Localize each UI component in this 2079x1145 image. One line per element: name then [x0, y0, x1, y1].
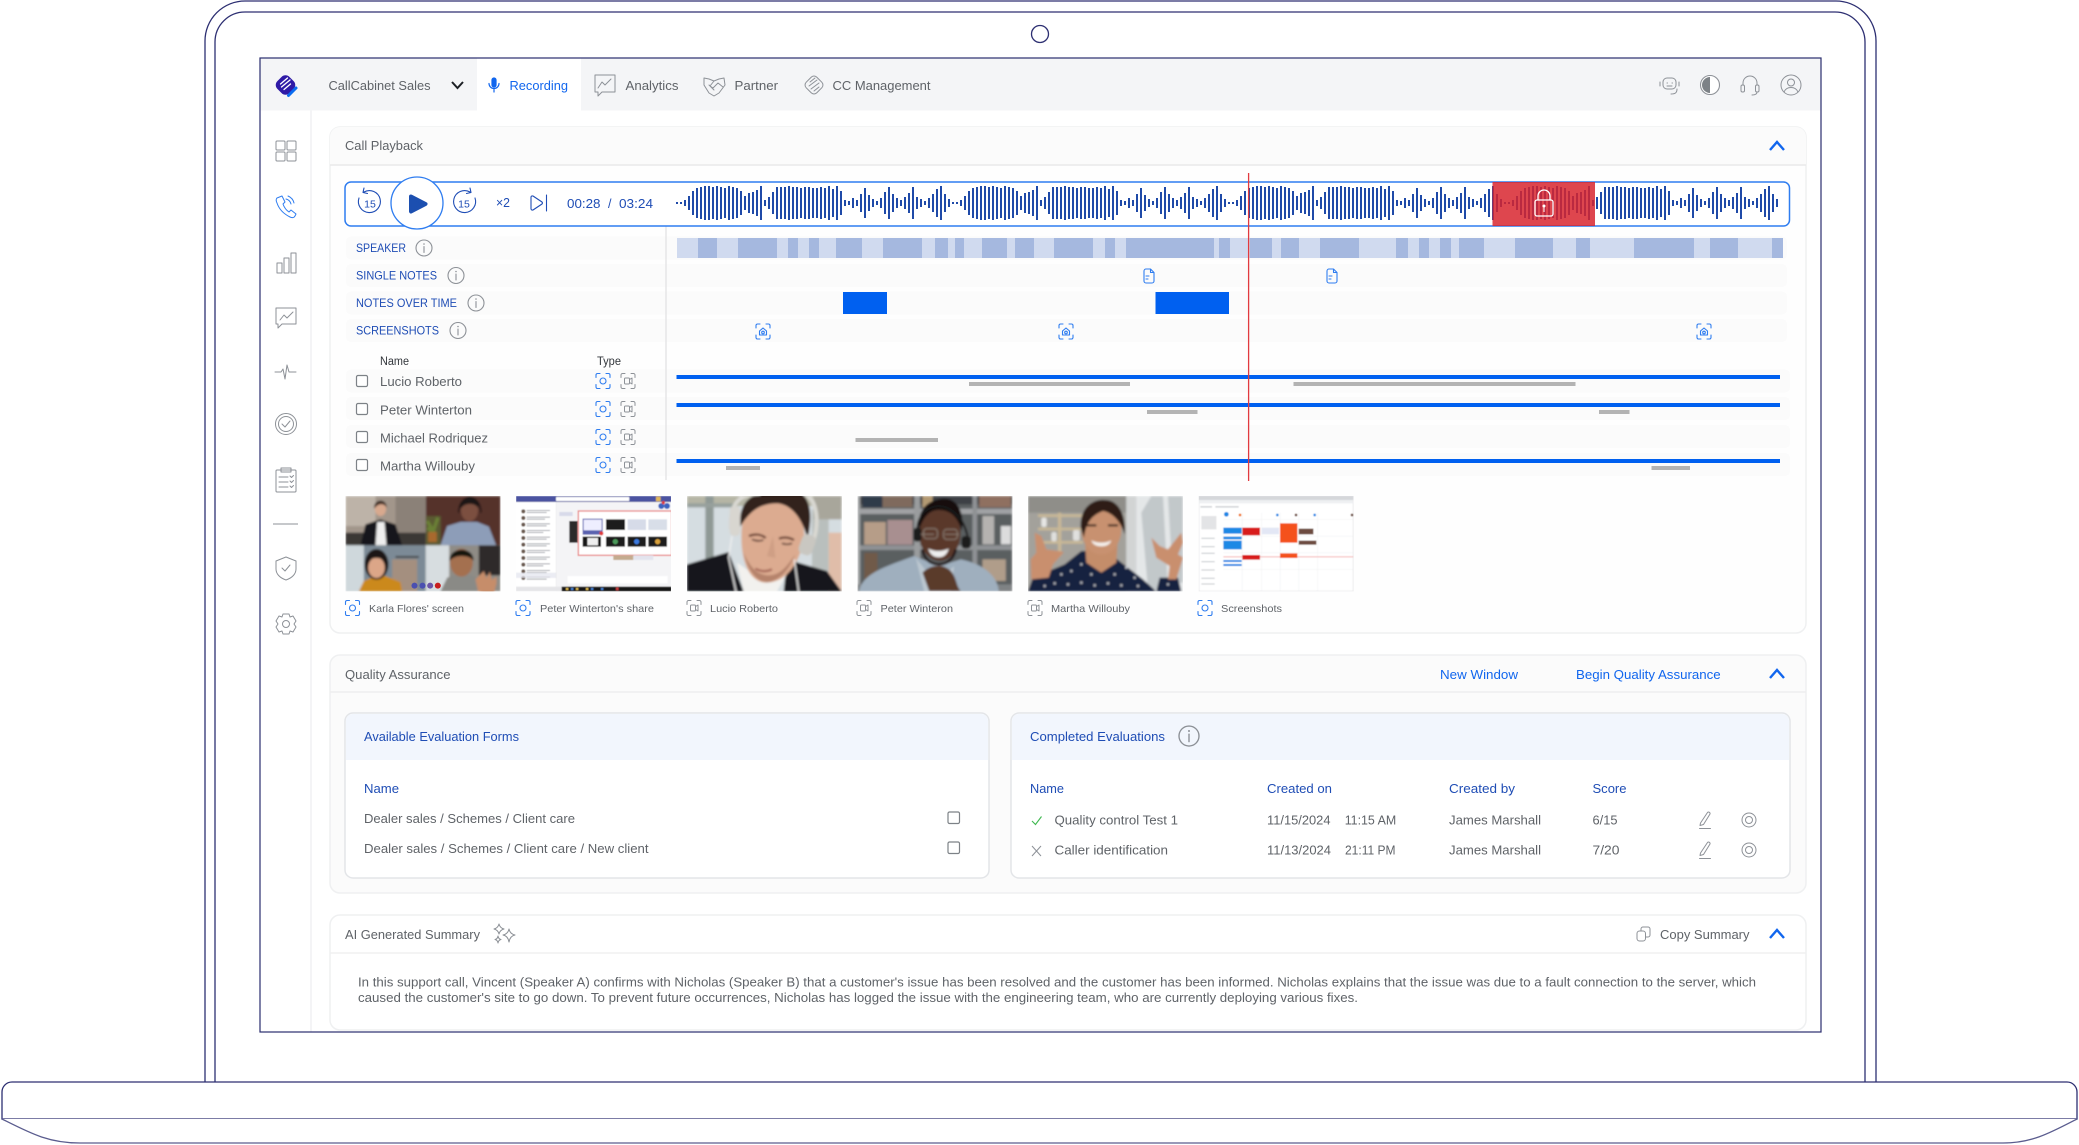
heading: ai generated summary: AI Generated Summary — [345, 928, 481, 942]
icon: headset — [1741, 76, 1759, 95]
label: single notes: SINGLE NOTES — [356, 268, 437, 282]
left sidebar — [273, 110, 311, 1032]
icon: shield — [276, 557, 296, 580]
participants table header: Type — [597, 356, 621, 368]
speaker track — [677, 238, 1783, 258]
caption: martha willouby: Martha Willouby — [1051, 603, 1131, 615]
summary text: In this support call, Vincent (Speaker A) confirms with Nicholas (Speaker B) that a customer's issue has been resolved and the customer has been informed. Nicholas explains that the issue was due to a fault connection to the server, which — [358, 976, 1756, 990]
card: completed evaluations — [1011, 713, 1790, 878]
participants table header — [380, 356, 621, 368]
laptop lid outline — [205, 1, 1876, 1082]
icon: collapse chevron — [1770, 142, 1784, 150]
time display: 00:28 — [567, 197, 601, 211]
tab: analytics: Analytics — [626, 79, 678, 93]
evaluation row 1: James Marshall — [1449, 814, 1541, 828]
audio waveform — [677, 186, 1777, 220]
panel: ai generated summary — [330, 915, 1806, 1030]
evaluation row 1 — [1032, 812, 1756, 828]
icon: play button — [391, 177, 443, 229]
participant: peter winterton — [356, 402, 635, 418]
copy summary button: Copy Summary — [1660, 928, 1750, 942]
participant: martha willouby — [356, 458, 635, 474]
icon: analytics — [595, 75, 615, 96]
participant: michael rodriquez — [356, 430, 635, 446]
panel: call playback — [330, 127, 1806, 633]
label: notes over time: NOTES OVER TIME — [356, 296, 457, 310]
icon: forward 15 — [454, 188, 476, 213]
icon: rewind 15 — [358, 188, 380, 213]
icon: bar chart — [277, 253, 296, 273]
evaluation row 2: Caller identification — [1054, 844, 1168, 858]
form row 1 — [364, 812, 960, 826]
icon: sparkles — [494, 924, 515, 943]
evaluation row 1: 11:15 AM — [1345, 814, 1396, 828]
icon: collapse chevron — [1770, 930, 1784, 938]
icon: logo — [273, 73, 298, 97]
thumbnail: peter winteron — [858, 496, 1012, 591]
participants table header: Name — [380, 356, 409, 368]
single note markers — [1144, 269, 1337, 283]
table header — [1030, 782, 1627, 796]
heading: call playback: Call Playback — [345, 139, 424, 153]
participant: lucio roberto: Lucio Roberto — [380, 375, 462, 389]
participant: lucio roberto — [356, 374, 635, 389]
tab: cc management: CC Management — [832, 79, 931, 93]
evaluation row 2: 7/20 — [1592, 844, 1620, 858]
tab: partner: Partner — [734, 79, 778, 93]
icon: cc management — [803, 74, 825, 96]
table header: Created on — [1267, 782, 1332, 796]
caption: peter winterton share — [516, 600, 654, 616]
participant: martha willouby: Martha Willouby — [380, 460, 476, 474]
laptop base — [2, 1082, 2077, 1143]
thumbnail: calendar screenshot — [1199, 496, 1353, 591]
evaluation row 2: James Marshall — [1449, 844, 1541, 858]
icon: skip — [531, 195, 546, 211]
form row 2: Dealer sales / Schemes / Client care / New client — [364, 842, 649, 856]
icon: forward 15: 15 — [458, 198, 470, 210]
app screen — [260, 58, 1821, 1032]
evaluation row 1: Quality control Test 1 — [1054, 814, 1178, 828]
time display: 03:24 — [619, 197, 653, 211]
panel: quality assurance — [330, 655, 1806, 893]
screenshot markers — [756, 324, 1711, 339]
caption: peter winteron — [857, 600, 953, 616]
evaluation row 2 — [1032, 842, 1756, 858]
table header: Score — [1592, 782, 1627, 796]
icon: contrast — [1700, 76, 1720, 94]
caption: peter winteron: Peter Winteron — [880, 603, 953, 615]
label: screenshots: SCREENSHOTS — [356, 324, 439, 338]
thumbnail: group video screen — [346, 496, 500, 596]
icon: trend chat — [276, 308, 296, 328]
participant silence bars — [726, 382, 1690, 470]
icon: handshake — [704, 78, 725, 96]
icon: phone — [276, 196, 296, 218]
column heading: Name — [364, 782, 399, 796]
icon: bot — [1660, 78, 1679, 94]
caption: lucio roberto: Lucio Roberto — [710, 603, 778, 615]
caption: martha willouby — [1028, 600, 1131, 616]
label: speaker: SPEAKER — [356, 241, 406, 255]
thumbnail: martha willouby — [1028, 496, 1183, 591]
redacted section with lock — [1492, 182, 1595, 226]
summary text — [358, 976, 1756, 1005]
table header: Created by — [1449, 782, 1516, 796]
icon: pulse — [275, 365, 296, 379]
top navigation bar — [260, 58, 1821, 110]
icon: clipboard — [276, 468, 296, 492]
icon: verified — [276, 414, 296, 434]
card heading: Available Evaluation Forms — [364, 730, 519, 744]
link: new window: New Window — [1440, 668, 1519, 682]
icon: webcam — [1032, 26, 1048, 42]
evaluation row 2: 11/13/2024 — [1267, 844, 1331, 858]
evaluation row 1: 11/15/2024 — [1267, 814, 1331, 828]
icon: collapse chevron — [1770, 670, 1784, 678]
caption: screenshots — [1198, 600, 1282, 616]
audio player — [345, 177, 1790, 229]
label: speaker — [356, 240, 432, 256]
card heading — [1030, 726, 1199, 746]
account name: CallCabinet Sales — [328, 79, 430, 93]
caption: karla flores screen: Karla Flores' screen — [369, 603, 464, 615]
participant: michael rodriquez: Michael Rodriquez — [380, 432, 488, 446]
caption: peter winterton share: Peter Winterton's share — [540, 603, 654, 615]
card: available evaluation forms — [345, 713, 989, 878]
time display — [567, 197, 653, 211]
notes over time bars — [843, 292, 1229, 314]
icon: rewind 15: 15 — [364, 198, 376, 210]
icon: settings gear — [276, 614, 296, 634]
icon: copy — [1637, 927, 1650, 941]
participant: peter winterton: Peter Winterton — [380, 404, 472, 418]
evaluation row 2: 21:11 PM — [1345, 844, 1396, 858]
caption: lucio roberto — [687, 600, 778, 616]
thumbnail: lucio roberto — [687, 493, 842, 591]
icon: user — [1781, 75, 1801, 95]
summary text: caused the customer's site to go down. To prevent future occurrences, Nicholas has logged the issue with the engineering team, who are currently deploying various fixes. — [358, 991, 1358, 1005]
caption: screenshots: Screenshots — [1221, 603, 1282, 615]
link: begin quality assurance: Begin Quality Assurance — [1576, 668, 1721, 682]
table header: Name — [1030, 782, 1064, 796]
form row 1: Dealer sales / Schemes / Client care — [364, 812, 575, 826]
evaluation row 1: 6/15 — [1592, 814, 1618, 828]
form row 2 — [364, 842, 960, 856]
icon: microphone — [489, 78, 499, 92]
tab: recording: Recording — [510, 79, 568, 93]
participant speech bars — [676, 375, 1780, 463]
thumbnail: shared screen — [516, 496, 672, 591]
icon: dashboard grid — [276, 141, 296, 161]
heading: quality assurance: Quality Assurance — [345, 668, 451, 682]
caption: karla flores screen — [346, 600, 464, 616]
playback speed: ×2 — [496, 195, 510, 210]
playhead — [1248, 173, 1250, 481]
time display: / — [608, 197, 612, 211]
row backgrounds — [346, 236, 1790, 476]
card heading: Completed Evaluations — [1030, 730, 1165, 744]
icon: dropdown chevron — [452, 82, 463, 88]
